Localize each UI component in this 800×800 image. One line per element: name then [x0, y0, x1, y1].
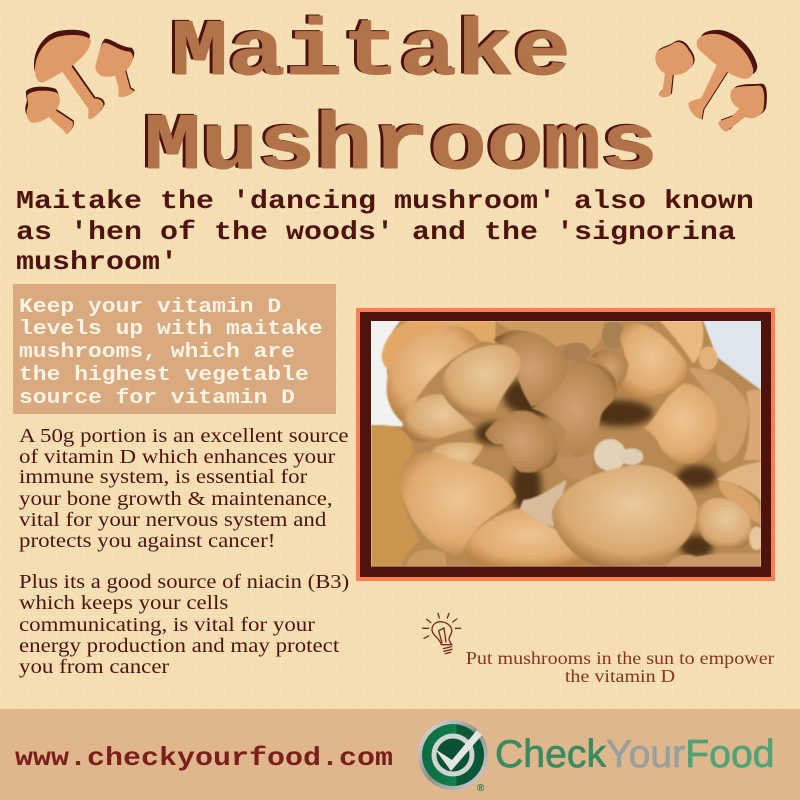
text block: vitamin D benefits: protects you against cancer! [19, 529, 275, 552]
photo: maitake mushroom [371, 321, 764, 567]
title: Mushrooms [141, 101, 655, 192]
footer url: www.checkyourfood.com [15, 745, 393, 773]
text block: vitamin D benefits: your bone growth & maintenance, [19, 487, 333, 510]
icon: mushrooms right [655, 30, 767, 132]
text block: niacin: you from cancer [19, 655, 170, 678]
callout: vitamin D: Keep your vitamin D [19, 296, 281, 318]
text block: niacin [19, 570, 349, 678]
text block: niacin: communicating, is vital for your [19, 613, 316, 636]
subtitle: as 'hen of the woods' and the 'signorina [16, 219, 736, 247]
text block: vitamin D benefits: immune system, is essential for [19, 465, 308, 488]
text block: vitamin D benefits: vital for your nervous system and [19, 508, 326, 531]
text block: vitamin D benefits [19, 424, 349, 552]
icon: light bulb [423, 613, 461, 654]
text block: tip: the vitamin D [565, 667, 675, 687]
callout: vitamin D: mushrooms, which are [19, 341, 295, 363]
footer band [0, 709, 800, 800]
callout: vitamin D: source for vitamin D [19, 387, 295, 409]
subtitle: mushroom' [16, 249, 178, 277]
text block: vitamin D benefits: of vitamin D which enhances your [19, 445, 336, 468]
text block: niacin: Plus its a good source of niacin (B3) [19, 570, 349, 593]
text block: tip [466, 649, 775, 687]
title [141, 7, 658, 193]
subtitle [16, 188, 754, 277]
photo frame [356, 308, 775, 581]
callout: vitamin D: the highest vegetable [19, 364, 309, 386]
title: Mushrooms [144, 102, 658, 193]
title: Maitake [168, 7, 568, 98]
callout: vitamin D [13, 284, 336, 414]
icon: mushrooms left [25, 30, 135, 134]
text block: vitamin D benefits: A 50g portion is an excellent source [19, 424, 349, 447]
subtitle: Maitake the 'dancing mushroom' also known [16, 188, 754, 216]
logo: check mark badge [418, 720, 488, 794]
text block: niacin: which keeps your cells [19, 591, 228, 614]
logo: check mark badge: ® [477, 783, 485, 794]
callout: vitamin D: levels up with maitake [19, 318, 323, 340]
text block: tip: Put mushrooms in the sun to empower [466, 649, 775, 669]
title: Maitake [171, 8, 571, 99]
logo: wordmark: CheckYourFood [495, 733, 775, 776]
text block: niacin: energy production and may protect [19, 634, 339, 657]
